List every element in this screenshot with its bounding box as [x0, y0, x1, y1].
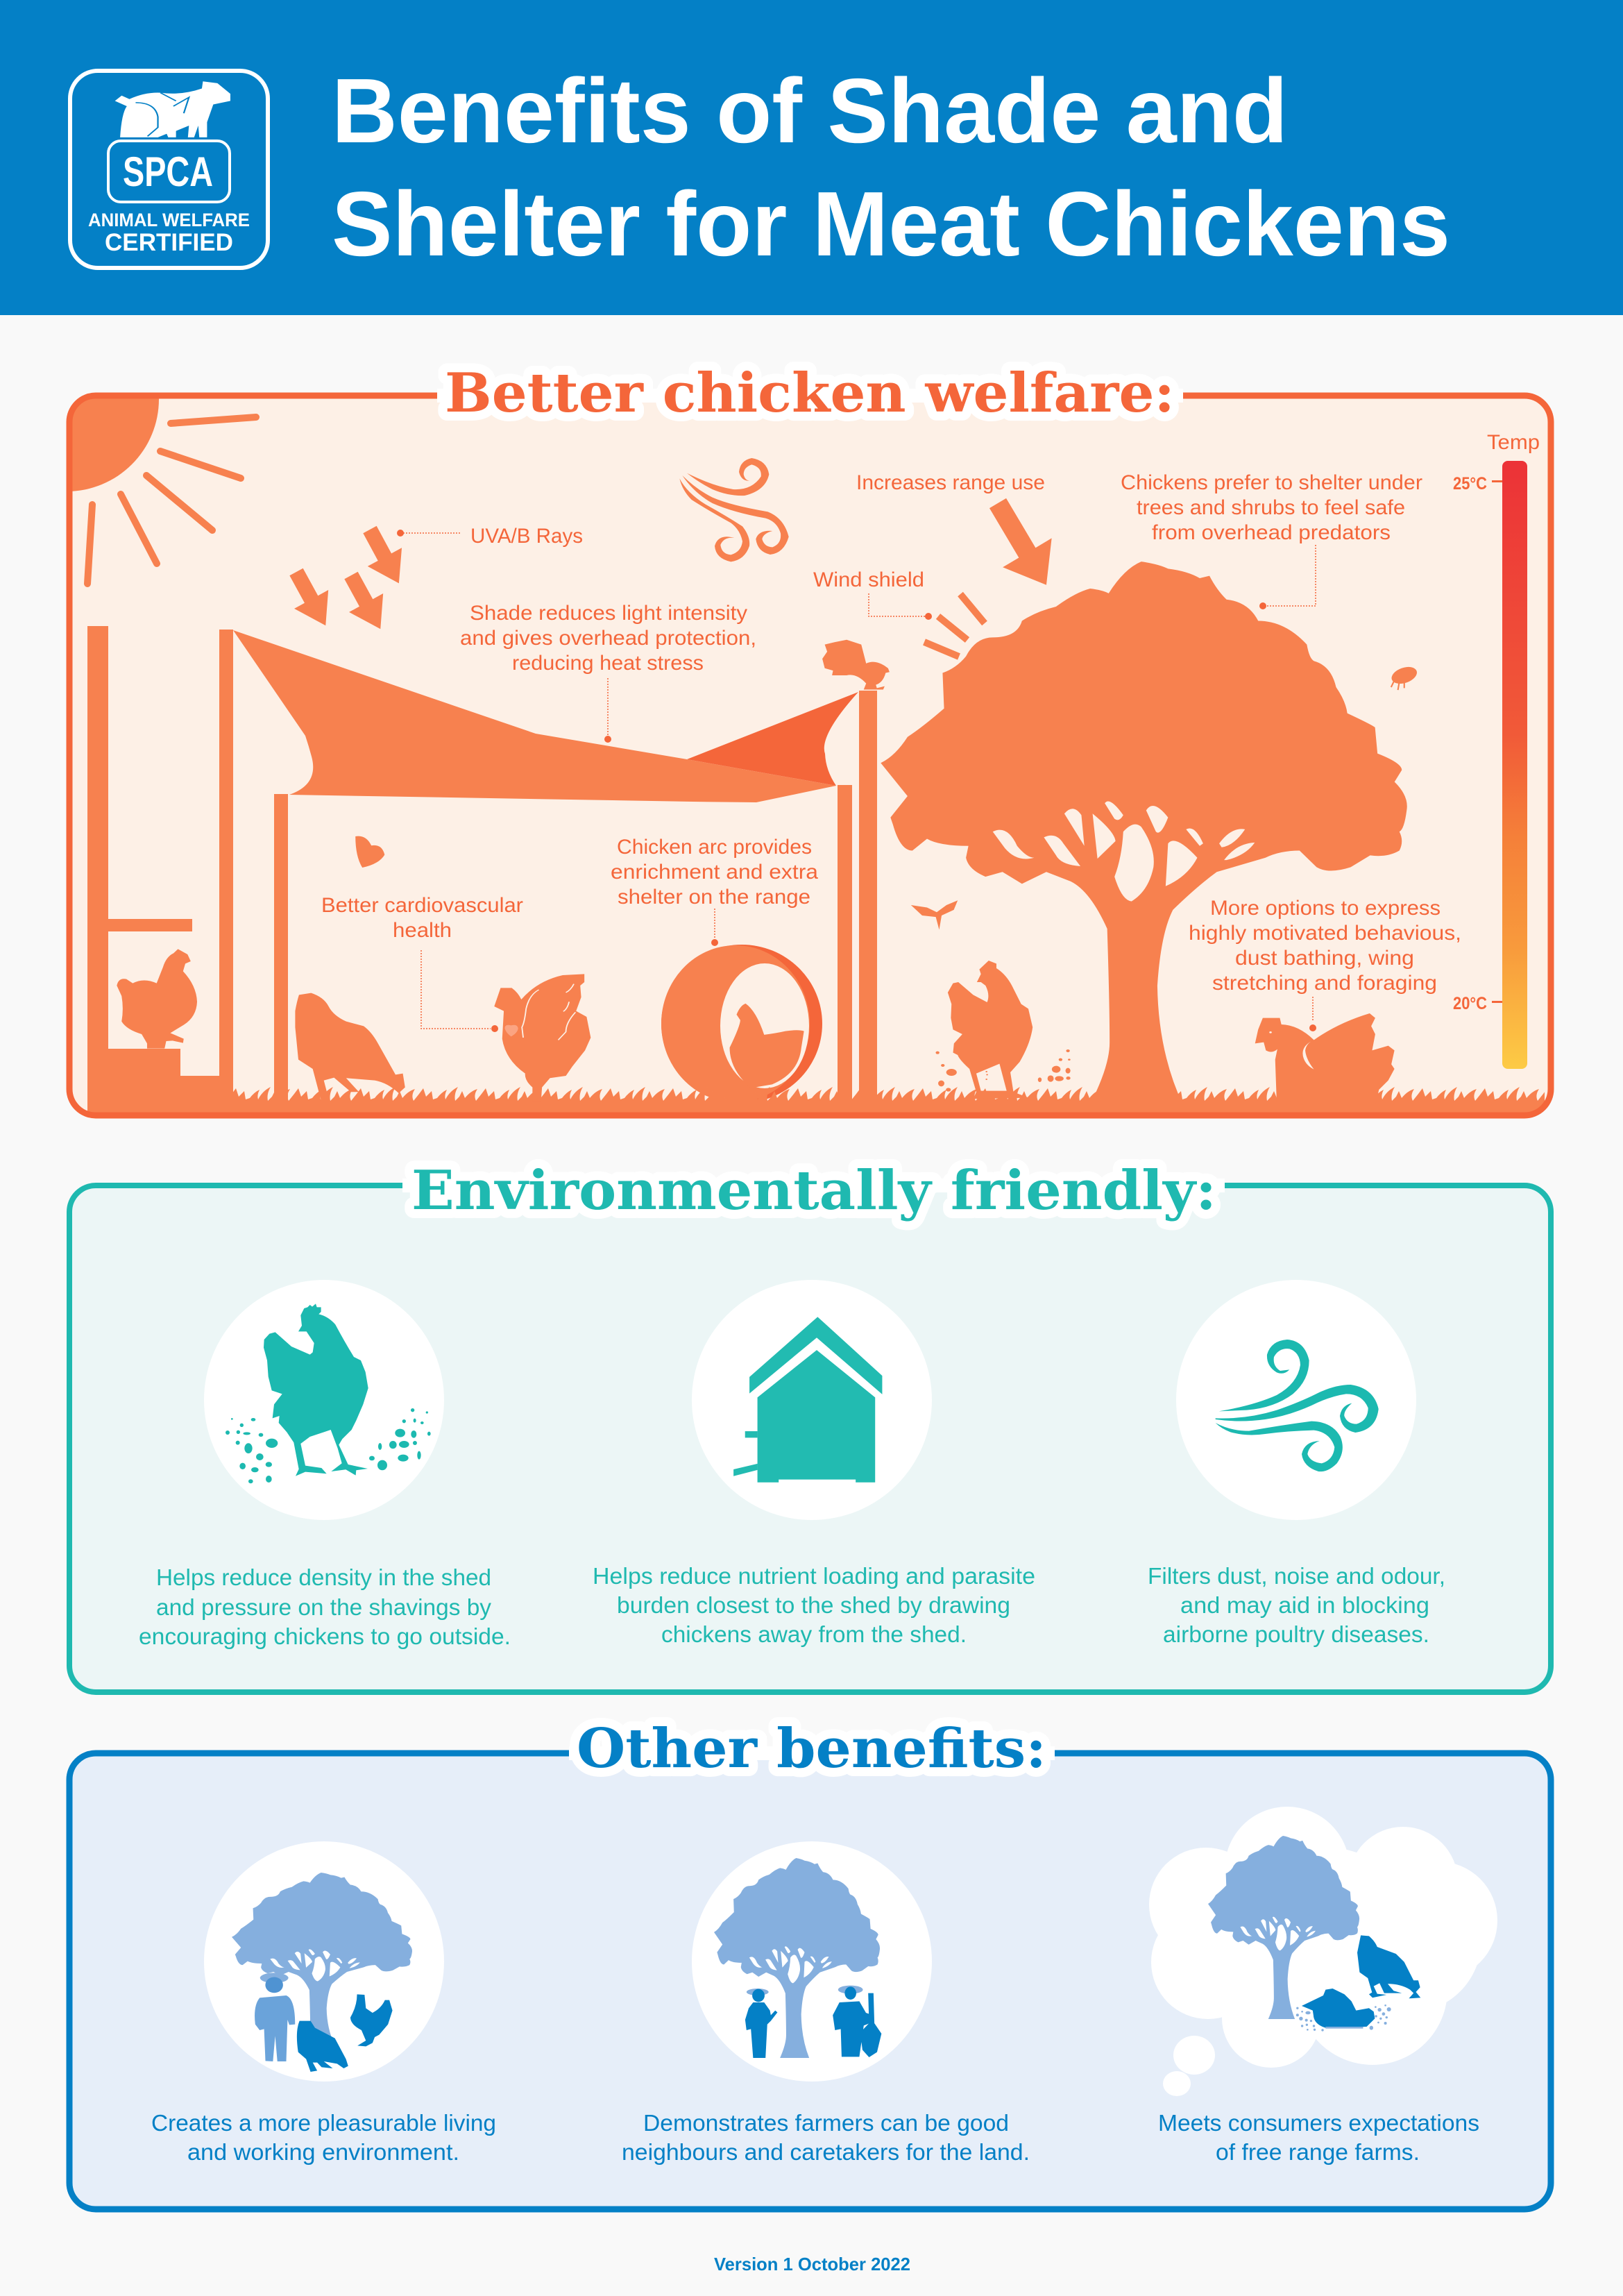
text: pleasurable environment: [151, 2110, 496, 2165]
text: reduce nutrient loading: chickens away from the shed.: [661, 1621, 967, 1647]
logo: SPCA Animal Welfare Certified: ANIMAL WELFARE: [88, 210, 250, 230]
label: shade reduces light intensity: reducing heat stress: [512, 652, 704, 675]
icon: thought cloud: [1149, 1807, 1497, 2096]
temperature scale: Temp: [1487, 431, 1540, 454]
text: reduce nutrient loading: burden closest to the shed by drawing: [617, 1592, 1010, 1618]
label: better cardiovascular health: Better cardiovascular: [321, 894, 523, 917]
icon: tree with chickens in thought: [1208, 1836, 1420, 2032]
text: filters dust: airborne poultry diseases.: [1163, 1621, 1429, 1647]
label: shelter under trees: trees and shrubs to feel safe: [1137, 496, 1405, 519]
footer version note: Version 1 October 2022: [714, 2254, 910, 2274]
chicken group: left side: [117, 949, 590, 1101]
label: shelter under trees: [1121, 471, 1422, 609]
chicken pecking: [295, 993, 405, 1099]
text: good neighbours: neighbours and caretakers for the land.: [622, 2139, 1030, 2165]
text: good neighbours: Demonstrates farmers can be good: [643, 2110, 1009, 2136]
header banner: [0, 0, 1623, 315]
chicken on step: [117, 949, 197, 1049]
text: pleasurable environment: Creates a more pleasurable living: [151, 2110, 496, 2136]
big arrow: increases range use: [989, 498, 1052, 585]
heading: environmentally friendly: Environmentally friendly:: [411, 1159, 1216, 1222]
text: pleasurable environment: and working environment.: [187, 2139, 459, 2165]
big tree: [881, 562, 1407, 1104]
icon: wind: [1216, 1340, 1379, 1471]
chicken dust bathing: [1255, 1013, 1395, 1104]
label: wind shield: Wind shield: [813, 568, 924, 591]
label: more options: [1189, 897, 1461, 1031]
chicken in arc: [730, 1004, 804, 1088]
label: more options: stretching and foraging: [1212, 972, 1437, 995]
label: shade reduces light intensity: Shade reduces light intensity: [470, 602, 747, 625]
chicken in arc and butterfly: [355, 836, 804, 1088]
icon: chicken with shavings: [226, 1303, 431, 1483]
label: better cardiovascular health: [321, 894, 523, 1032]
panel 1 border: [69, 396, 1551, 1115]
animal group: right side: [822, 640, 1419, 930]
icon: dragonfly: [911, 900, 958, 930]
panel: environmentally friendly: [69, 1159, 1551, 1692]
heading: other benefits: Other benefits:: [577, 1717, 1046, 1780]
icon: tree with farmers: [714, 1858, 881, 2058]
chickens near tree: [935, 961, 1395, 1104]
panel: better chicken welfare: [67, 371, 1554, 1119]
label: wind shield: [813, 568, 932, 620]
icon: wind shield lines: [924, 594, 985, 657]
icon: bee: [1391, 666, 1417, 690]
logo: SPCA Animal Welfare Certified: [70, 71, 268, 268]
label: shelter under trees: from overhead predators: [1152, 521, 1391, 544]
chicken arc: [661, 945, 822, 1103]
icon: shed: [733, 1317, 882, 1483]
text: consumer expectations: [1158, 2110, 1479, 2165]
heading: better chicken welfare: Better chicken welfare:: [445, 362, 1175, 425]
label: chicken arc: Chicken arc provides: [617, 836, 812, 859]
text: reduce density: [139, 1564, 511, 1649]
item: consumer expectations: [1149, 1807, 1497, 2165]
title: [332, 60, 1450, 275]
icon: tree with farmer and chickens: [232, 1873, 412, 2072]
text: consumer expectations: Meets consumers expectations: [1158, 2110, 1479, 2136]
text: good neighbours: [622, 2110, 1030, 2165]
label: chicken arc: [611, 836, 818, 946]
label: shade reduces light intensity: [460, 602, 756, 743]
label: better cardiovascular health: health: [393, 919, 452, 942]
shade sail: [233, 630, 858, 802]
label: increases range use: Increases range use: [856, 471, 1045, 494]
logo: SPCA Animal Welfare Certified: SPCA: [123, 149, 213, 195]
icon: butterfly: [355, 836, 384, 868]
text: filters dust: [1148, 1563, 1445, 1647]
label: shade reduces light intensity: and gives overhead protection,: [460, 627, 756, 650]
logo: SPCA Animal Welfare Certified: CERTIFIED: [105, 229, 233, 256]
panel: other benefits: [69, 1717, 1551, 2209]
text: reduce density: encouraging chickens to go outside.: [139, 1623, 511, 1649]
text: filters dust: and may aid in blocking: [1180, 1592, 1429, 1618]
item: good neighbours: [622, 1841, 1030, 2165]
chicken scratching with dust: [935, 961, 1071, 1099]
label: more options: More options to express: [1210, 897, 1441, 920]
item: pleasurable environment: [151, 1841, 496, 2165]
label: shelter under trees: Chickens prefer to shelter under: [1121, 471, 1422, 494]
item: reduce nutrient loading: [593, 1280, 1035, 1647]
temperature scale: 25°C: [1453, 474, 1487, 493]
text: reduce density: and pressure on the shavings by: [156, 1594, 491, 1620]
fantail bird: [822, 640, 890, 689]
label: UVA/B rays: [397, 525, 583, 548]
icon: wind swirl: [679, 458, 789, 562]
illustration: farm scene: [0, 307, 1552, 1116]
label: chicken arc: enrichment and extra: [611, 861, 818, 884]
text: reduce nutrient loading: Helps reduce nutrient loading and parasite: [593, 1563, 1035, 1589]
shed posts and steps: [87, 626, 877, 1115]
label: more options: highly motivated behavious,: [1189, 922, 1461, 945]
title: Benefits of Shade and: [332, 60, 1288, 162]
label: more options: dust bathing, wing: [1235, 947, 1414, 970]
ground and grass: [92, 1087, 1545, 1112]
text: reduce nutrient loading: [593, 1563, 1035, 1647]
icon: sun: [72, 398, 260, 587]
text: reduce density: Helps reduce density in the shed: [156, 1564, 491, 1590]
item: reduce density: [139, 1280, 511, 1649]
item: filters dust: [1148, 1280, 1445, 1647]
label: chicken arc: shelter on the range: [618, 886, 810, 909]
chicken stretching with heart: [494, 974, 590, 1101]
temperature scale: 20°C: [1453, 994, 1487, 1013]
text: consumer expectations: of free range farms.: [1216, 2139, 1420, 2165]
label: UVA/B rays: UVA/B Rays: [470, 525, 583, 548]
title: Shelter for Meat Chickens: [332, 173, 1450, 275]
text: filters dust: Filters dust, noise and odour,: [1148, 1563, 1445, 1589]
temperature scale: [1453, 431, 1540, 1069]
icon: UV ray arrows: [289, 526, 402, 629]
